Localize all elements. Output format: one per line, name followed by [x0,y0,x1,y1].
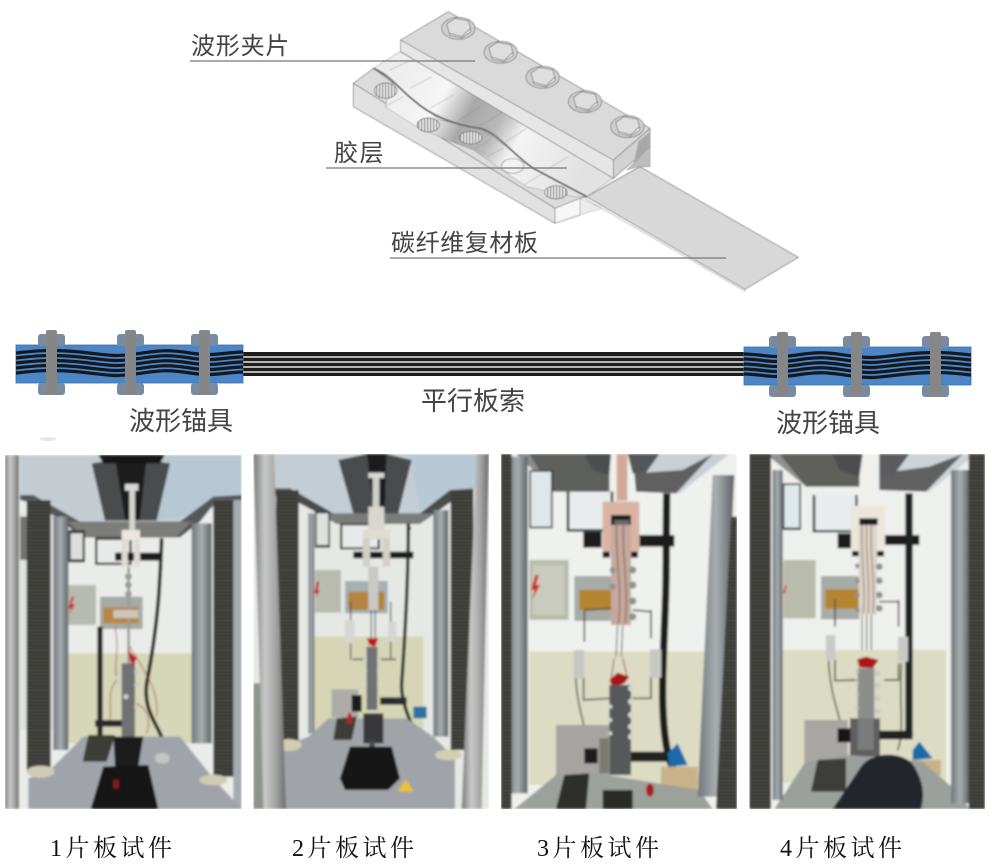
adhesive layer and wave plate [373,52,613,197]
diagram: wave anchor assembly [190,12,798,291]
caption: 1-plate specimen: 1片板试件 [50,835,176,862]
photo: 3-plate specimen [501,454,737,809]
label: wave clamp plate: 波形夹片 [191,33,290,60]
label: parallel plate cable: 平行板索 [421,386,525,416]
label: adhesive layer: 胶层 [334,140,385,167]
photo: 4-plate specimen [749,454,985,809]
upper clamp plate [401,12,650,178]
caption: 3-plate specimen: 3片板试件 [537,835,662,862]
caption: 2-plate specimen: 2片板试件 [292,835,418,862]
parallel plates [240,352,750,376]
carbon fibre plate [585,167,798,291]
left wave anchor [16,330,243,395]
caption: 4-plate specimen: 4片板试件 [780,835,906,862]
label: left wave anchor: 波形锚具 [129,406,233,436]
diagram: parallel plate cable [16,330,971,441]
hex bolts [442,17,644,138]
label: right wave anchor: 波形锚具 [776,408,880,438]
photo: 2-plate specimen [253,454,489,809]
right wave anchor [744,332,971,397]
lower clamp plate [353,68,602,223]
photo: 1-plate specimen [5,455,242,809]
bolt holes [374,83,567,199]
label: carbon fibre composite plate: 碳纤维复材板 [391,230,539,257]
